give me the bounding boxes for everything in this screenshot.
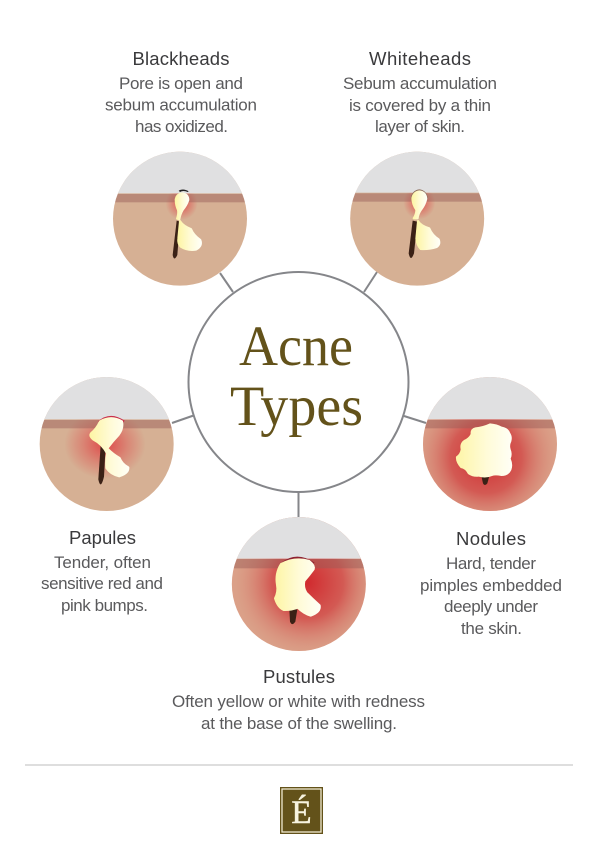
label: nodules: pimples embedded	[420, 576, 562, 595]
central circle	[188, 272, 408, 492]
panel: nodules illustration	[423, 377, 557, 511]
logo	[280, 787, 323, 834]
label: pustules: Pustules	[263, 666, 335, 687]
label: blackheads: has oxidized.	[135, 117, 228, 136]
label: whiteheads	[343, 48, 497, 136]
label: blackheads: sebum accumulation	[105, 96, 257, 114]
label: whiteheads: Sebum accumulation	[343, 74, 497, 93]
label: blackheads: Pore is open and	[119, 74, 243, 93]
panel: blackheads illustration	[113, 152, 247, 286]
logo: É	[291, 794, 312, 831]
label: nodules: deeply under	[444, 597, 538, 616]
title	[230, 315, 363, 438]
label: nodules: the skin.	[461, 619, 522, 638]
label: papules	[41, 527, 163, 615]
title: Acne	[239, 315, 353, 378]
panel: pustules illustration	[232, 517, 366, 651]
label: pustules: Often yellow or white with redness	[172, 692, 425, 711]
label: papules: sensitive red and	[41, 574, 163, 593]
label: papules: pink bumps.	[61, 596, 148, 615]
label: nodules: Hard, tender	[446, 554, 536, 573]
label: whiteheads: Whiteheads	[369, 48, 471, 69]
label: nodules	[420, 528, 562, 638]
label: pustules	[172, 666, 425, 733]
panel: whiteheads illustration	[350, 152, 484, 286]
label: blackheads: Blackheads	[132, 48, 230, 69]
connector lines	[172, 272, 426, 518]
label: papules: Tender, often	[54, 553, 151, 572]
panel: papules illustration	[40, 377, 174, 511]
label: blackheads	[105, 48, 257, 136]
label: pustules: at the base of the swelling.	[201, 714, 397, 733]
label: whiteheads: layer of skin.	[375, 117, 465, 136]
title: Types	[230, 375, 363, 438]
label: papules: Papules	[69, 527, 136, 548]
label: whiteheads: is covered by a thin	[349, 96, 491, 115]
label: nodules: Nodules	[456, 528, 526, 549]
